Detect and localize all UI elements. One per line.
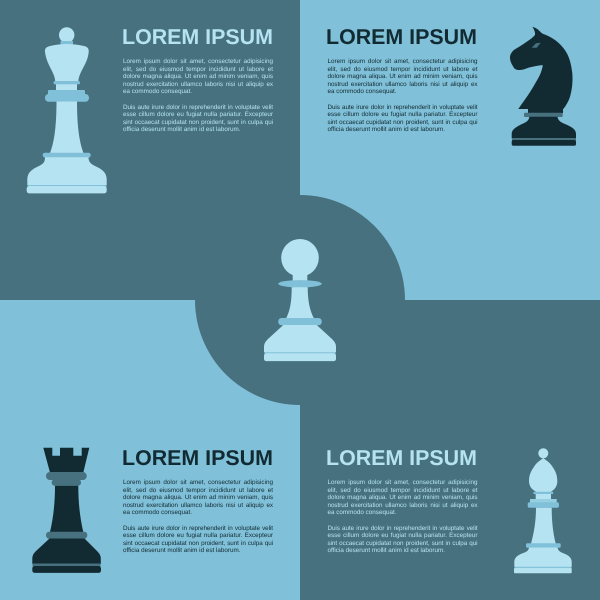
heading: top right: LOREM IPSUM bbox=[326, 25, 477, 49]
text block: bottom left: sint occaecat cupidatat non proident, sunt in culpa qui bbox=[123, 540, 273, 547]
text block: bottom left: officia deserunt mollit anim id est laborum. bbox=[123, 547, 240, 554]
heading: bottom right: LOREM IPSUM bbox=[326, 446, 477, 470]
text block: bottom left: Lorem ipsum dolor sit amet, consectetur adipisicing bbox=[123, 479, 273, 486]
text block: top right: dolore magna aliqua. Ut enim ad minim veniam, quis bbox=[328, 73, 478, 80]
text block: top right: sint occaecat cupidatat non proident, sunt in culpa qui bbox=[328, 119, 478, 126]
text block: bottom right: esse cillum dolore eu fugiat nulla pariatur. Excepteur bbox=[328, 532, 478, 539]
icon: bishop bbox=[514, 448, 572, 573]
text block: bottom right: Duis aute irure dolor in reprehenderit in voluptate velit bbox=[328, 525, 478, 532]
text block: bottom right: officia deserunt mollit anim id est laborum. bbox=[328, 547, 445, 554]
text block: top right: nostrud exercitation ullamco laboris nisi ut aliquip ex bbox=[328, 81, 478, 88]
text block: top left bbox=[123, 58, 273, 133]
text block: bottom left: esse cillum dolore eu fugiat nulla pariatur. Excepteur bbox=[123, 532, 273, 539]
text block: bottom right: Lorem ipsum dolor sit amet, consectetur adipisicing bbox=[328, 479, 478, 486]
text block: bottom left: ea commodo consequat. bbox=[123, 509, 192, 516]
text block: top right: ea commodo consequat. bbox=[328, 88, 396, 95]
text block: bottom right: sint occaecat cupidatat non proident, sunt in culpa qui bbox=[328, 540, 478, 547]
text block: top right: Lorem ipsum dolor sit amet, consectetur adipisicing bbox=[328, 58, 478, 65]
text block: bottom right: ea commodo consequat. bbox=[328, 509, 396, 516]
text block: top left: esse cillum dolore eu fugiat nulla pariatur. Excepteur bbox=[123, 111, 273, 118]
heading: bottom left: LOREM IPSUM bbox=[122, 446, 273, 470]
text block: top right bbox=[328, 58, 478, 133]
icon: king bbox=[27, 27, 107, 193]
text block: top left: elit, sed do eiusmod tempor incididunt ut labore et bbox=[123, 66, 273, 72]
text block: bottom right: dolore magna aliqua. Ut enim ad minim veniam, quis bbox=[328, 494, 478, 501]
text block: bottom right: elit, sed do eiusmod tempor incididunt ut labore et bbox=[328, 486, 478, 494]
text block: top left: Lorem ipsum dolor sit amet, consectetur adipisicing bbox=[123, 58, 273, 65]
text block: top left: ea commodo consequat. bbox=[123, 88, 192, 95]
text block: bottom left: elit, sed do eiusmod tempor incididunt ut labore et bbox=[123, 486, 273, 494]
text block: top left: nostrud exercitation ullamco laboris nisi ut aliquip ex bbox=[123, 81, 273, 88]
icon: knight bbox=[510, 27, 576, 146]
text block: top left: officia deserunt mollit anim id est laborum. bbox=[123, 126, 240, 133]
text block: top left: dolore magna aliqua. Ut enim ad minim veniam, quis bbox=[123, 73, 273, 80]
text block: bottom right: nostrud exercitation ullamco laboris nisi ut aliquip ex bbox=[328, 502, 478, 509]
icon: rook bbox=[32, 448, 101, 573]
text block: bottom left bbox=[123, 479, 273, 554]
text block: bottom right bbox=[328, 479, 478, 554]
text block: bottom left: nostrud exercitation ullamco laboris nisi ut aliquip ex bbox=[123, 502, 273, 509]
text block: bottom left: dolore magna aliqua. Ut enim ad minim veniam, quis bbox=[123, 494, 273, 501]
text block: top left: Duis aute irure dolor in reprehenderit in voluptate velit bbox=[123, 104, 273, 111]
text block: bottom left: Duis aute irure dolor in reprehenderit in voluptate velit bbox=[123, 525, 273, 532]
text block: top right: Duis aute irure dolor in reprehenderit in voluptate velit bbox=[328, 104, 478, 111]
heading: top left: LOREM IPSUM bbox=[122, 25, 273, 49]
text block: top right: officia deserunt mollit anim id est laborum. bbox=[328, 126, 445, 133]
text block: top right: esse cillum dolore eu fugiat nulla pariatur. Excepteur bbox=[328, 111, 478, 118]
text block: top right: elit, sed do eiusmod tempor incididunt ut labore et bbox=[328, 66, 478, 72]
text block: top left: sint occaecat cupidatat non proident, sunt in culpa qui bbox=[123, 119, 273, 126]
icon: pawn bbox=[264, 239, 336, 361]
